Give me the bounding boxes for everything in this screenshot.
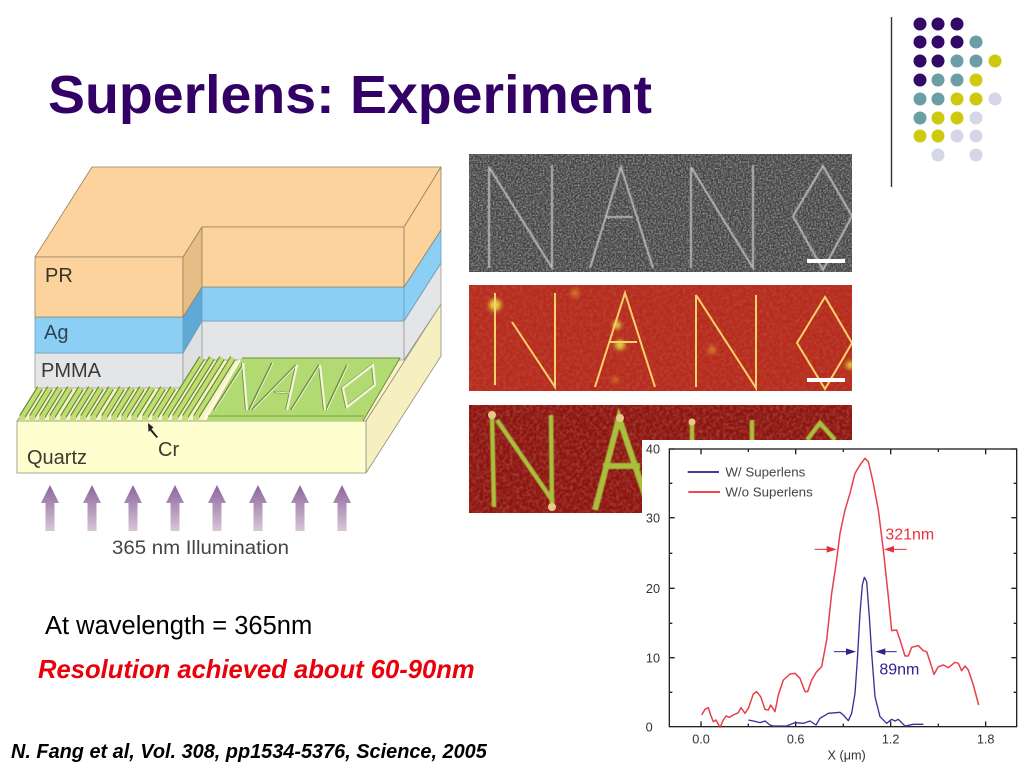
illumination arrows bbox=[41, 485, 351, 531]
image panel: red fluorescence with superlens bbox=[469, 285, 854, 391]
title: Superlens: Experiment bbox=[48, 65, 652, 125]
image panel: red fluorescence without superlens bbox=[469, 405, 852, 513]
plot frame and ticks bbox=[669, 449, 1017, 727]
layered superlens diagram bbox=[17, 167, 441, 559]
annotation: 89nm width: 89nm bbox=[879, 661, 919, 678]
label: Quartz: Quartz bbox=[27, 447, 87, 469]
line chart: intensity profile bbox=[642, 440, 1020, 768]
y axis labels: 10 bbox=[646, 651, 660, 665]
decorative dot grid icon bbox=[892, 17, 1002, 187]
y axis labels: 0 bbox=[646, 720, 653, 734]
text: citation: N. Fang et al, Vol. 308, pp1534-5376, Science, 2005 bbox=[11, 741, 488, 763]
legend: W/ Superlens bbox=[725, 464, 806, 479]
annotation: 321nm width bbox=[815, 526, 934, 553]
label: Ag: Ag bbox=[44, 322, 68, 344]
y axis labels: 20 bbox=[646, 582, 660, 596]
label: PMMA: PMMA bbox=[41, 360, 102, 382]
label: PR: PR bbox=[45, 265, 73, 287]
label: 365 nm Illumination: 365 nm Illumination bbox=[112, 538, 289, 559]
image panel: grey SEM NANO bbox=[469, 154, 852, 272]
red curve: without superlens bbox=[702, 458, 979, 727]
x axis labels: X (μm) bbox=[828, 748, 866, 762]
text: wavelength: At wavelength = 365nm bbox=[45, 612, 312, 640]
x axis labels bbox=[692, 733, 994, 762]
Cr NANO pad bbox=[206, 358, 400, 421]
y axis labels: 40 bbox=[646, 443, 660, 457]
layer: PMMA bbox=[35, 263, 441, 388]
x axis labels: 1.8 bbox=[977, 733, 994, 747]
text: resolution achieved: Resolution achieved about 60-90nm bbox=[38, 656, 475, 684]
layer: PR bbox=[35, 167, 441, 317]
blue curve: with superlens bbox=[748, 577, 923, 726]
x axis labels: 1.2 bbox=[882, 733, 899, 747]
y axis labels: 30 bbox=[646, 511, 660, 525]
layer: Ag bbox=[35, 230, 441, 353]
label: Cr with pointer bbox=[148, 423, 179, 461]
legend: W/o Superlens bbox=[725, 484, 813, 499]
x axis labels: 0.6 bbox=[787, 733, 804, 747]
Cr grating bbox=[19, 358, 240, 421]
label: Cr with pointer: Cr bbox=[158, 439, 179, 461]
y axis labels bbox=[646, 443, 660, 734]
annotation: 89nm width bbox=[834, 648, 919, 678]
x axis labels: 0.0 bbox=[692, 733, 710, 747]
annotation: 321nm width: 321nm bbox=[885, 526, 934, 543]
layer: quartz substrate bbox=[17, 304, 441, 473]
legend bbox=[688, 464, 813, 499]
